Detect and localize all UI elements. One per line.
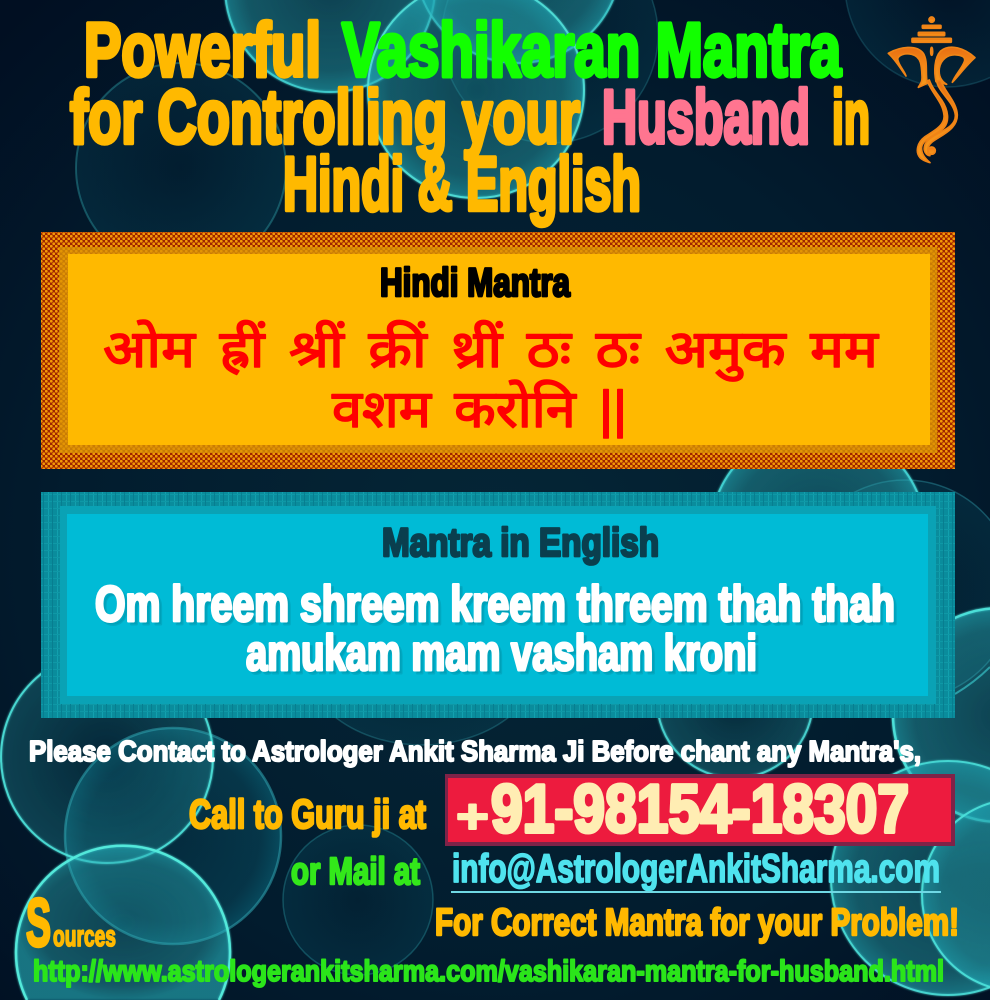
panel: english mantra: [41, 492, 955, 718]
icon: ganesha: [888, 17, 975, 163]
text: english mantra verse: [95, 576, 898, 684]
title: for Controlling your: [70, 75, 580, 160]
text: mail label: or Mail at: [291, 851, 420, 893]
title: Powerful: [84, 8, 321, 93]
text: english mantra verse: amukam mam vasham kroni: [249, 628, 760, 684]
title: [70, 8, 870, 227]
text: sources label: ources: [53, 920, 116, 953]
panel: hindi mantra: [41, 232, 955, 469]
text: sources label: S: [26, 885, 51, 961]
title: Husband: [602, 75, 810, 160]
text: hindi mantra verse: [103, 320, 879, 439]
heading: hindi mantra: Hindi Mantra: [380, 261, 571, 305]
phone box: +: [456, 791, 489, 844]
title: Hindi & English: [283, 142, 641, 227]
heading: mantra in english: Mantra in English: [382, 521, 659, 565]
text: hindi mantra verse: ओम ह्रीं श्रीं क्रीं थ्रीं ठः ठः अमुक मम: [103, 320, 879, 382]
text: english mantra verse: amukam mam vasham kroni: [246, 625, 757, 681]
text: sources label: [26, 885, 116, 961]
phone box: 91-98154-18307: [491, 771, 909, 847]
text: call label: Call to Guru ji at: [189, 791, 426, 837]
title: in: [832, 75, 870, 160]
text: hindi mantra verse: वशम करोनि ||: [332, 381, 627, 439]
